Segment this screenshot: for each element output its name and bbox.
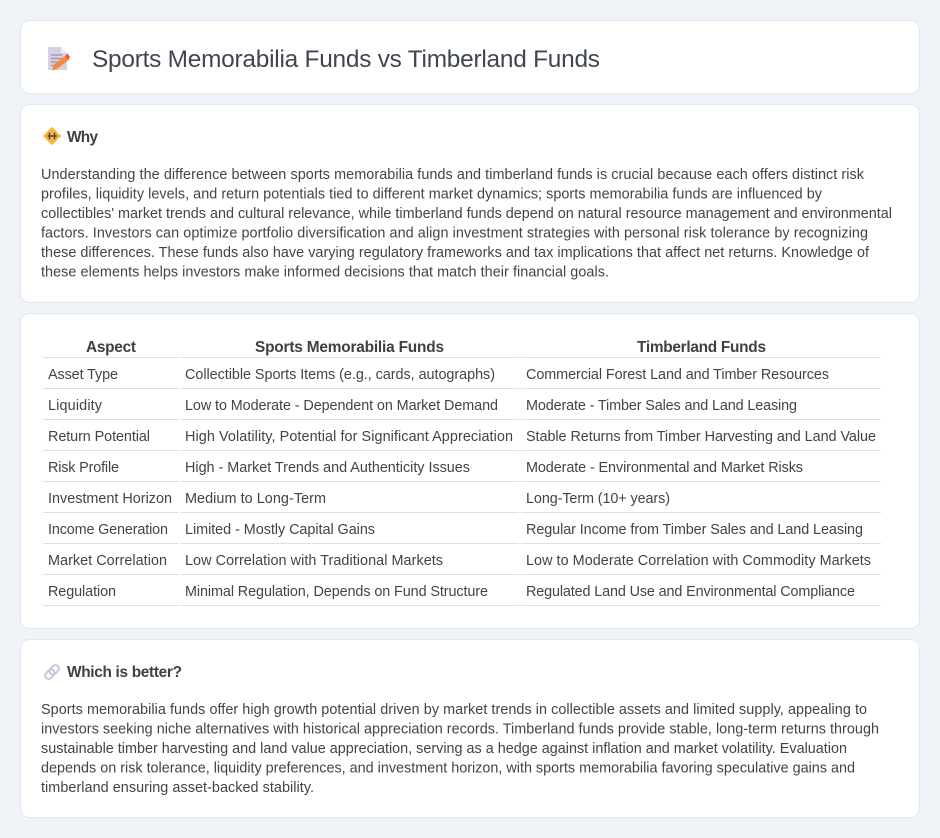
text block: which is better paragraph: investors seeking niche alternatives with historical appreciation records. Timberland funds provide stable, long-term returns through [41, 722, 879, 738]
row: liquidity: Liquidity [48, 398, 103, 414]
text block: why paragraph [41, 167, 892, 280]
row: income generation: Limited - Mostly Capital Gains [185, 522, 375, 538]
text block: why paragraph: collectibles' market trends and cultural relevance, while timberland funds depend on natural resource management and environmental [41, 206, 892, 222]
row: investment horizon: Long-Term (10+ years) [526, 491, 670, 507]
text block: why paragraph: profiles, liquidity levels, and return potentials tied to different market dynamics; sports memorabilia funds are influenced by [41, 186, 823, 202]
table header: Timberland Funds [637, 339, 766, 356]
panel: which is better [20, 640, 920, 818]
panel: why [20, 104, 920, 302]
icon: chain link [44, 664, 60, 680]
row: asset type: Asset Type [48, 367, 118, 383]
heading: why: Why [67, 129, 98, 146]
heading: which is better: Which is better? [67, 664, 182, 681]
row: return potential [48, 429, 876, 445]
row: income generation: Regular Income from Timber Sales and Land Leasing [526, 522, 863, 538]
text block: which is better paragraph: depends on risk tolerance, liquidity preferences, and investment horizon, with sports memorabilia favoring speculative gains and [41, 760, 855, 776]
table header: Aspect [86, 339, 136, 356]
row: return potential: High Volatility, Potential for Significant Appreciation [185, 429, 513, 445]
table header [86, 339, 766, 356]
row: market correlation: Market Correlation [48, 553, 167, 569]
row: market correlation: Low Correlation with Traditional Markets [185, 553, 443, 569]
text block: why paragraph: these elements helps investors make informed decisions that match their financial goals. [41, 264, 609, 280]
panel: comparison table [20, 314, 920, 628]
row: regulation [48, 584, 855, 600]
row: asset type: Commercial Forest Land and Timber Resources [526, 367, 829, 383]
row: asset type: Collectible Sports Items (e.g., cards, autographs) [185, 367, 495, 383]
row: risk profile [48, 460, 803, 476]
row: liquidity [48, 398, 797, 414]
row: liquidity: Low to Moderate - Dependent on Market Demand [185, 398, 498, 414]
row: regulation: Minimal Regulation, Depends on Fund Structure [185, 584, 488, 600]
row: income generation [48, 522, 863, 538]
row: regulation: Regulation [48, 584, 116, 600]
row: asset type [48, 367, 829, 383]
title: Sports Memorabilia Funds vs Timberland Funds [92, 46, 600, 73]
row: regulation: Regulated Land Use and Environmental Compliance [526, 584, 855, 600]
panel: title card [20, 20, 920, 94]
text block: why paragraph: factors. Investors can optimize portfolio diversification and align investment strategies with personal risk tolerance by recognizing [41, 226, 868, 242]
icon: orange diamond sign [44, 128, 60, 144]
row: market correlation [48, 553, 871, 569]
text block: which is better paragraph: timberland ensuring asset-backed stability. [41, 780, 314, 796]
row: market correlation: Low to Moderate Correlation with Commodity Markets [526, 553, 871, 569]
row: risk profile: Moderate - Environmental and Market Risks [526, 460, 803, 476]
row: investment horizon [48, 491, 670, 507]
row: investment horizon: Medium to Long-Term [185, 491, 326, 507]
row: liquidity: Moderate - Timber Sales and Land Leasing [526, 398, 797, 414]
table header: Sports Memorabilia Funds [255, 339, 444, 356]
text block: which is better paragraph: Sports memorabilia funds offer high growth potential driven by market trends in collectible assets and limited supply, appealing to [41, 702, 867, 718]
row: investment horizon: Investment Horizon [48, 491, 172, 507]
row: risk profile: Risk Profile [48, 460, 119, 476]
row: income generation: Income Generation [48, 522, 168, 538]
row: return potential: Stable Returns from Timber Harvesting and Land Value [526, 429, 876, 445]
icon: memo with pencil [48, 47, 70, 70]
text block: why paragraph: these differences. These funds also have varying regulatory frameworks and tax implications that affect net returns. Knowledge of [41, 245, 870, 261]
text block: which is better paragraph [41, 702, 879, 796]
text block: why paragraph: Understanding the difference between sports memorabilia funds and timberland funds is crucial because each offers distinct risk [41, 167, 865, 183]
row: risk profile: High - Market Trends and Authenticity Issues [185, 460, 470, 476]
row: return potential: Return Potential [48, 429, 150, 445]
text block: which is better paragraph: sustainable timber harvesting and land value appreciation, serving as a hedge against inflation and market volatility. Evaluation [41, 741, 847, 757]
